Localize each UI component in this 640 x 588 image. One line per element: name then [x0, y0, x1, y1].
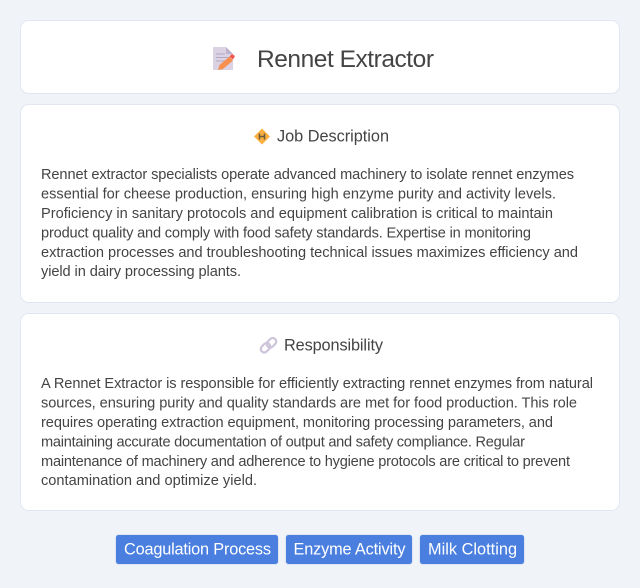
- job description text: extraction processes and troubleshooting technical issues maximizes efficiency and: [41, 245, 578, 261]
- panel: responsibility: [20, 314, 620, 510]
- tag: milk clotting: [420, 534, 524, 564]
- job description text: yield in dairy processing plants.: [41, 264, 241, 280]
- panel: job description: [20, 104, 620, 302]
- responsibility text: maintaining accurate documentation of output and safety compliance. Regular: [41, 434, 525, 450]
- panel: title card: [20, 20, 620, 94]
- responsibility text: sources, ensuring purity and quality standards are met for food production. This role: [41, 396, 577, 412]
- tag: coagulation process: Coagulation Process: [124, 540, 271, 558]
- job description text: essential for cheese production, ensuring high enzyme purity and activity levels.: [41, 186, 556, 202]
- title: Rennet Extractor: [257, 46, 434, 73]
- icon: chain link: [259, 337, 278, 354]
- responsibility text: [41, 376, 593, 489]
- responsibility text: contamination and optimize yield.: [41, 473, 257, 489]
- tag: coagulation process: [116, 534, 278, 564]
- responsibility text: A Rennet Extractor is responsible for efficiently extracting rennet enzymes from natural: [41, 376, 593, 392]
- job description text: Proficiency in sanitary protocols and equipment calibration is critical to maintain: [41, 206, 553, 222]
- job description text: [41, 167, 578, 280]
- job description text: product quality and comply with food safety standards. Expertise in monitoring: [41, 226, 531, 242]
- responsibility text: maintenance of machinery and adherence to hygiene protocols are critical to prevent: [41, 454, 570, 470]
- heading: responsibility: Responsibility: [284, 336, 384, 354]
- heading: job description: Job Description: [277, 128, 389, 146]
- responsibility text: requires operating extraction equipment, monitoring processing parameters, and: [41, 415, 553, 431]
- job description text: Rennet extractor specialists operate advanced machinery to isolate rennet enzymes: [41, 167, 574, 183]
- tag: milk clotting: Milk Clotting: [428, 540, 517, 558]
- tag: enzyme activity: Enzyme Activity: [294, 540, 406, 558]
- icon: road sign: [254, 128, 270, 144]
- icon: document with pencil: [213, 47, 235, 70]
- tag: enzyme activity: [286, 534, 412, 564]
